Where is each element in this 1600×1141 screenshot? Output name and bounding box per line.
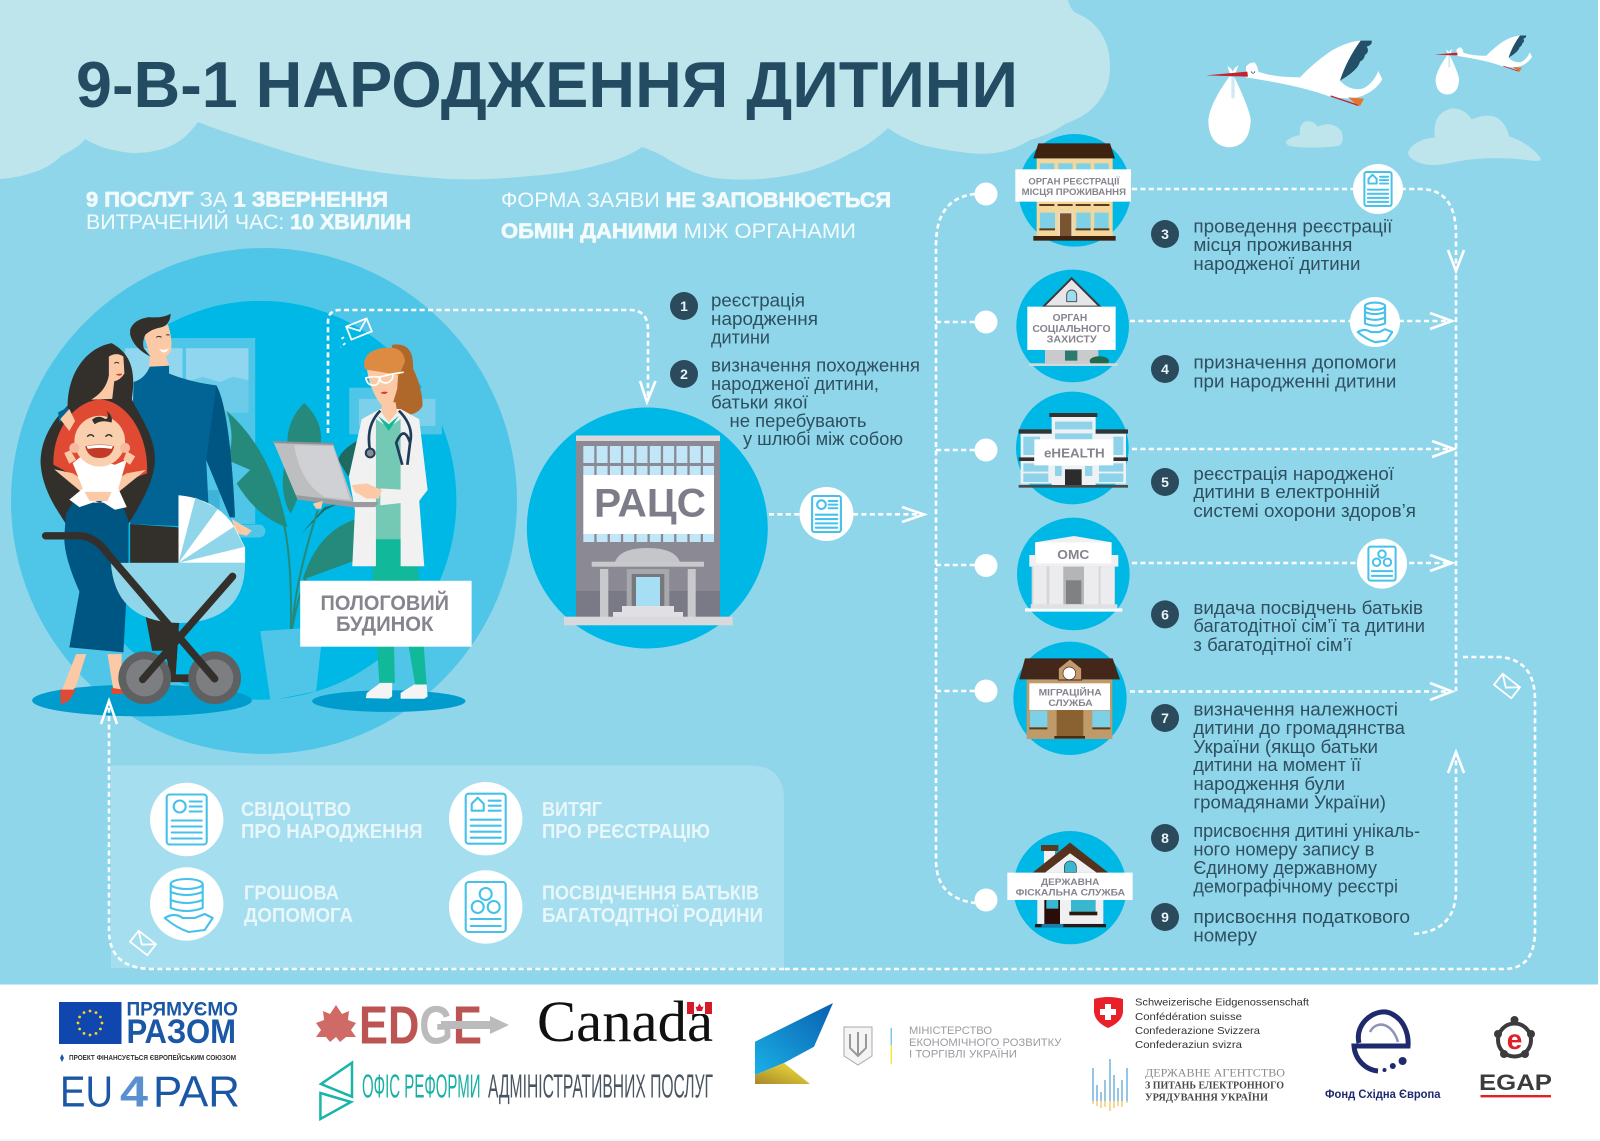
result: large family ID: БАГАТОДІТНОЇ РОДИНИ — [542, 904, 763, 927]
building: migration service: СЛУЖБА — [1048, 698, 1093, 708]
item 8: присвоєння дитині унікаль- — [1193, 821, 1420, 841]
building: migration service: МІГРАЦІЙНА — [1039, 686, 1102, 697]
logo: EGAP: EGAP — [1479, 1070, 1552, 1095]
item 8: ного номеру запису в — [1193, 840, 1374, 860]
building: local government — [1017, 518, 1130, 630]
building: fiscal service: ФІСКАЛЬНА СЛУЖБА — [1016, 888, 1126, 898]
floor shadow family — [32, 685, 252, 716]
item 4: при народженні дитини — [1193, 372, 1396, 392]
item 9 — [1151, 903, 1410, 946]
arrowheads — [101, 250, 1464, 773]
windows — [583, 446, 714, 542]
maternity hospital scene — [11, 248, 517, 754]
item 3: місця проживання — [1193, 235, 1352, 255]
item 8 — [1151, 821, 1420, 897]
plant — [227, 403, 357, 632]
icon: envelope top — [334, 318, 373, 347]
item 3: народженої дитини — [1193, 254, 1360, 274]
man — [130, 314, 252, 682]
logo: EGAP: e — [1507, 1024, 1522, 1055]
logo: Swiss Confederation: Confédération suisse — [1135, 1011, 1242, 1023]
inner circle — [64, 301, 456, 700]
logo: EU Working Together: ПРОЕКТ ФІНАНСУЄТЬСЯ ЄВРОПЕЙСЬКИМ СОЮЗОМ — [69, 1053, 236, 1062]
item 2: визначення походження — [711, 356, 920, 376]
stork small — [1434, 35, 1532, 95]
logo: Swiss Confederation — [1094, 997, 1309, 1051]
footer partners band: АДМІНІСТРАТИВНИХ ПОСЛУГ — [488, 1068, 713, 1105]
building: eHealth: eHEALTH — [1044, 445, 1105, 460]
item 7: 7 — [1161, 710, 1169, 726]
item 3 — [1151, 217, 1392, 274]
item 9: номеру — [1193, 926, 1257, 946]
storks and clouds illustration — [1206, 35, 1541, 165]
outer circle — [11, 248, 517, 754]
item 7: народження були — [1193, 774, 1345, 794]
item 4: 4 — [1161, 361, 1169, 377]
item 7: України (якщо батьки — [1193, 737, 1378, 757]
item 2: у шлюбі між собою — [743, 429, 903, 449]
woman with baby — [41, 343, 155, 705]
result: large family ID: ПОСВІДЧЕННЯ БАТЬКІВ — [542, 883, 759, 905]
item 9: присвоєння податкового — [1193, 907, 1410, 927]
item 5: 5 — [1161, 474, 1169, 490]
logo: State e-Government Agency: УРЯДУВАННЯ УКРАЇНИ — [1145, 1091, 1268, 1104]
item 1: дитини — [711, 328, 770, 348]
cloud small — [1286, 121, 1343, 148]
result: cash assistance: ДОПОМОГА — [244, 905, 353, 927]
key facts: right — [501, 189, 891, 243]
building: residence registration — [1015, 134, 1131, 247]
logo: Office of Administrative Services Reform: ОФІС РЕФОРМИ — [362, 1068, 481, 1105]
building: eHealth — [1016, 392, 1129, 504]
logo: Ministry mark: МІНІСТЕРСТВО — [909, 1025, 992, 1037]
icon: coins — [1350, 297, 1400, 347]
dashed network — [784, 189, 1535, 969]
building: social protection: СОЦІАЛЬНОГО — [1032, 324, 1111, 335]
window background — [122, 338, 265, 537]
wall picture — [349, 388, 442, 434]
logo: EU4PAR: PAR — [153, 1069, 240, 1117]
item 7 — [1151, 700, 1406, 812]
item 5: реєстрація народженої — [1193, 464, 1394, 484]
key facts: right: ФОРМА ЗАЯВИ НЕ ЗАПОВНЮЄТЬСЯ — [501, 189, 891, 212]
key facts: left: 9 ПОСЛУГ ЗА 1 ЗВЕРНЕННЯ — [86, 188, 388, 212]
panel: results — [109, 705, 784, 969]
key facts: left — [86, 188, 411, 234]
item 9: 9 — [1161, 909, 1169, 925]
item 1: реєстрація — [711, 290, 805, 310]
result: cash assistance — [150, 867, 353, 941]
logo: Swiss Confederation: Confederazione Svizzera — [1135, 1025, 1260, 1037]
logo: EDGE: EDGE — [359, 996, 482, 1056]
item 1 — [670, 290, 818, 348]
logo: State e-Government Agency — [1093, 1059, 1285, 1111]
building: local government: ОМС — [1057, 548, 1089, 562]
floor shadow doctor — [312, 690, 466, 712]
building: residence registration: МІСЦЯ ПРОЖИВАННЯ — [1022, 187, 1126, 197]
item 4 — [1151, 353, 1396, 392]
portico — [564, 548, 733, 625]
icon: large family document — [1357, 539, 1407, 589]
logo: EU4PAR: EU — [60, 1069, 113, 1117]
item 5: дитини в електронній — [1193, 482, 1380, 502]
item 7: дитини на момент її — [1193, 755, 1361, 775]
item 8: 8 — [1161, 830, 1169, 846]
logo: EU Working Together: ПРЯМУЄМО — [126, 999, 238, 1021]
logo: EGAP — [1479, 1016, 1552, 1097]
logo: Ministry mark — [755, 1003, 1062, 1084]
result: large family ID — [449, 870, 763, 944]
result: birth certificate: ПРО НАРОДЖЕННЯ — [241, 821, 422, 843]
building: migration service — [1013, 642, 1127, 755]
item 3: 3 — [1161, 226, 1169, 242]
logo: Canada: Canada — [537, 989, 713, 1054]
item 6: з багатодітної сім’ї — [1193, 635, 1352, 655]
logo: EU4PAR: 4 — [120, 1069, 149, 1117]
logo: EDGE — [316, 996, 509, 1056]
logo: EU Working Together: РАЗОМ — [126, 1013, 236, 1051]
result: registration extract: ПРО РЕЄСТРАЦІЮ — [542, 821, 710, 843]
maternity hospital scene: ПОЛОГОВИЙ — [320, 591, 449, 615]
logo: Swiss Confederation: Confederaziun svizra — [1135, 1039, 1242, 1051]
item 2: батьки якої — [711, 392, 808, 412]
logo: Ministry mark: І ТОРГІВЛІ УКРАЇНИ — [909, 1049, 1017, 1061]
item 6: багатодітної сім’ї та дитини — [1193, 616, 1425, 636]
doctor — [273, 344, 428, 699]
logo: EU4PAR — [60, 1069, 240, 1117]
title: 9-В-1 НАРОДЖЕННЯ ДИТИНИ — [76, 48, 1018, 121]
stroller — [46, 495, 245, 704]
icon: envelope right — [1494, 674, 1520, 698]
logo: East Europe Foundation — [1325, 1012, 1441, 1101]
building: residence registration: ОРГАН РЕЄСТРАЦІЇ — [1028, 176, 1120, 186]
building: social protection: ОРГАН — [1053, 313, 1087, 324]
header cloud — [0, 0, 1110, 180]
building: fiscal service — [1007, 831, 1133, 944]
footer partners band — [0, 984, 1600, 1141]
maternity hospital scene: БУДИНОК — [336, 613, 434, 636]
item 8: Єдиному державному — [1193, 858, 1377, 878]
registry name: РАЦС — [594, 482, 706, 526]
logo: State e-Government Agency: ДЕРЖАВНЕ АГЕНТСТВО — [1145, 1066, 1285, 1080]
result: registration extract — [449, 782, 710, 855]
building: fiscal service: ДЕРЖАВНА — [1041, 877, 1100, 887]
item 4: призначення допомоги — [1193, 353, 1396, 373]
item 7: громадянами України) — [1193, 792, 1386, 812]
flow arrow: registry to services — [769, 507, 925, 522]
item 7: визначення належності — [1193, 700, 1398, 720]
connection dots — [974, 182, 998, 912]
building: social protection: ЗАХИСТУ — [1047, 335, 1097, 346]
logo: Swiss Confederation: Schweizerische Eidgenossenschaft — [1135, 997, 1309, 1009]
plant pot — [260, 628, 325, 700]
logo: Ministry mark: ЕКОНОМІЧНОГО РОЗВИТКУ — [909, 1037, 1062, 1049]
result: registration extract: ВИТЯГ — [542, 799, 602, 821]
building: social protection — [1016, 270, 1129, 382]
item 1: народження — [711, 309, 818, 329]
label: maternity hospital — [300, 581, 472, 647]
item 8: демографічному реєстрі — [1193, 877, 1398, 897]
item 2: народженої дитини, — [711, 374, 879, 394]
icon: birth certificate document — [800, 487, 854, 541]
result: birth certificate — [150, 783, 422, 856]
item 6: 6 — [1161, 606, 1169, 622]
item 2: 2 — [680, 366, 688, 382]
result: cash assistance: ГРОШОВА — [244, 883, 339, 905]
key facts: right: ОБМІН ДАНИМИ МІЖ ОРГАНАМИ — [501, 220, 856, 243]
item 1: 1 — [680, 298, 688, 314]
stork large — [1206, 41, 1382, 147]
envelope over panel — [130, 931, 156, 955]
logo: EU Working Together — [59, 999, 238, 1062]
item 5 — [1151, 464, 1416, 521]
cloud large — [1408, 108, 1541, 165]
civil registry building — [527, 408, 768, 648]
item 3: проведення реєстрації — [1193, 217, 1392, 237]
item 6: видача посвідчень батьків — [1193, 598, 1423, 618]
result: birth certificate: СВІДОЦТВО — [241, 799, 351, 821]
item 2: не перебувають — [730, 411, 866, 431]
flow arrow: hospital to civil registry — [328, 310, 656, 433]
logo: State e-Government Agency: З ПИТАНЬ ЕЛЕКТРОННОГО — [1145, 1081, 1284, 1092]
logo: Office of Administrative Services Reform — [320, 1063, 713, 1119]
item 6 — [1151, 598, 1425, 655]
item 7: дитини до громадянства — [1193, 718, 1406, 738]
item 2 — [670, 356, 920, 449]
icon: registration extract document — [1353, 164, 1403, 214]
key facts: left: ВИТРАЧЕНИЙ ЧАС: 10 ХВИЛИН — [86, 210, 411, 234]
logo: East Europe Foundation: Фонд Східна Європа — [1325, 1087, 1441, 1101]
item 5: системі охорони здоров’я — [1193, 501, 1416, 521]
